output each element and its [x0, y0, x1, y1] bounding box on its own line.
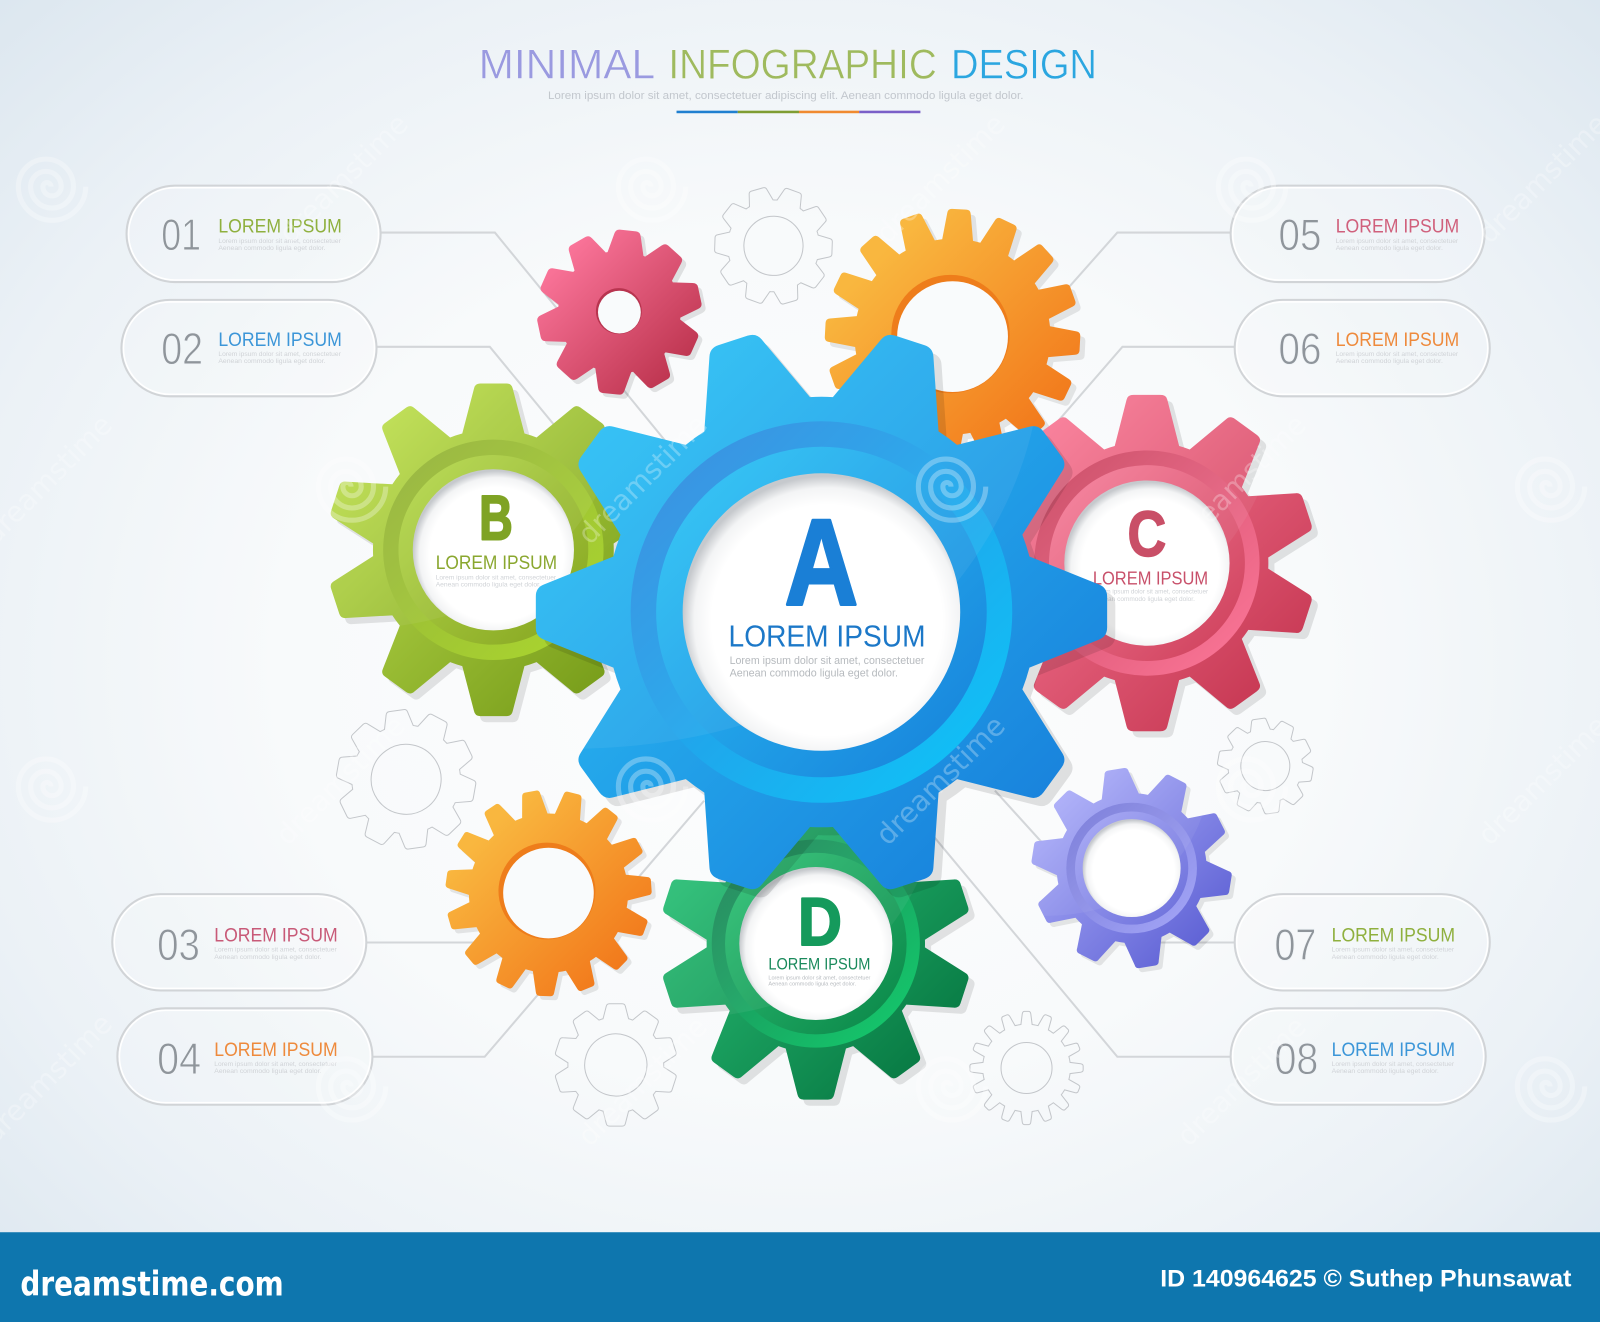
panel: item 02: LOREM IPSUM	[218, 329, 342, 351]
panel: item 02	[121, 300, 377, 396]
footer credit: ID 140964625 © Suthep Phunsawat	[1160, 1265, 1571, 1292]
gear D label: LOREM IPSUM	[768, 956, 870, 974]
title	[479, 42, 1097, 88]
gear B label: B	[479, 484, 513, 554]
gear: purple	[1032, 768, 1236, 972]
title underline	[677, 111, 920, 113]
watermark text: dreamstime	[571, 408, 714, 551]
panel: item 01: Lorem ipsum dolor sit amet, consectetuer	[218, 238, 341, 245]
watermark text: dreamstime	[869, 107, 1012, 250]
gear: small orange	[444, 789, 661, 1005]
gear C label: Aenean commodo ligula eget dolor.	[1093, 596, 1195, 603]
gear D: dark green	[663, 827, 974, 1106]
title: MINIMAL	[479, 42, 655, 88]
gear A label: A	[785, 493, 858, 630]
gear C label: C	[1128, 498, 1166, 570]
connector lines	[366, 233, 1235, 1057]
panel: item 04: 04	[157, 1033, 201, 1084]
panel: item 06: 06	[1279, 323, 1321, 374]
panel: item 07: Lorem ipsum dolor sit amet, consectetuer	[1332, 947, 1454, 954]
panel: item 05: LOREM IPSUM	[1336, 216, 1459, 238]
gear A label	[729, 493, 926, 679]
panel: item 02: Aenean commodo ligula eget dolor.	[218, 358, 326, 365]
watermark text: dreamstime	[1170, 408, 1313, 551]
gear C label: LOREM IPSUM	[1093, 567, 1208, 588]
gear D label: Lorem ipsum dolor sit amet, consectetuer	[768, 975, 871, 981]
outline gears	[325, 184, 1321, 1144]
panel: item 03	[112, 894, 366, 990]
panel: item 08: Lorem ipsum dolor sit amet, consectetuer	[1332, 1061, 1454, 1068]
panel: item 03: Aenean commodo ligula eget dolor.	[214, 954, 322, 961]
panel: item 01: Aenean commodo ligula eget dolor.	[218, 245, 326, 252]
panel: item 05: Aenean commodo ligula eget dolor.	[1336, 245, 1443, 252]
watermark text: dreamstime	[272, 107, 415, 250]
panel: item 04	[117, 1008, 372, 1105]
panel: item 03: 03	[157, 919, 200, 970]
panel: item 05	[1231, 186, 1485, 282]
panel: item 07	[1235, 894, 1490, 990]
gear D label: Aenean commodo ligula eget dolor.	[768, 981, 857, 987]
watermark text: dreamstime	[1170, 1009, 1313, 1153]
panel: item 06: LOREM IPSUM	[1336, 329, 1459, 351]
gear B label: Lorem ipsum dolor sit amet, consectetuer	[436, 574, 556, 581]
gear C label: Lorem ipsum dolor sit amet, consectetuer	[1093, 589, 1208, 596]
panel: item 01: LOREM IPSUM	[218, 216, 342, 238]
gear A label: LOREM IPSUM	[729, 620, 926, 654]
gear D label: D	[798, 885, 842, 960]
panel: item 03: LOREM IPSUM	[214, 925, 338, 947]
panel: item 08	[1231, 1008, 1486, 1105]
gear B label: LOREM IPSUM	[436, 552, 557, 574]
gear: large orange	[824, 208, 1086, 445]
gear B label	[436, 484, 557, 589]
watermark text: dreamstime	[269, 709, 412, 852]
gear A: main blue	[536, 334, 1116, 898]
outline gear bottom right	[970, 1011, 1083, 1125]
panel: item 06: Aenean commodo ligula eget dolor.	[1336, 358, 1443, 365]
watermark text: dreamstime	[571, 1009, 714, 1153]
outline gear right	[1210, 710, 1321, 822]
panel: item 03: Lorem ipsum dolor sit amet, consectetuer	[214, 947, 337, 954]
panel: item 01: 01	[161, 209, 201, 260]
footer logo: dreamstime.com	[20, 1264, 284, 1303]
watermark text	[0, 107, 1600, 1153]
gear A label: Lorem ipsum dolor sit amet, consectetuer	[730, 655, 925, 667]
panel: item 04: Lorem ipsum dolor sit amet, consectetuer	[214, 1061, 337, 1068]
panel: item 08: Aenean commodo ligula eget dolor.	[1332, 1068, 1439, 1075]
footer banner	[0, 1232, 1600, 1322]
panel: item 07: 07	[1274, 919, 1316, 970]
gear A label: Aenean commodo ligula eget dolor.	[730, 667, 898, 679]
panel: item 01	[127, 186, 381, 282]
gear C: red	[1022, 394, 1318, 738]
panel: item 06	[1235, 300, 1490, 396]
outline gear top	[713, 184, 834, 308]
panel: item 04: LOREM IPSUM	[214, 1039, 338, 1061]
subtitle: Lorem ipsum dolor sit amet, consectetuer adipiscing elit. Aenean commodo ligula eget dolor.	[548, 90, 1023, 102]
gear C label	[1093, 498, 1208, 603]
panel: item 08: LOREM IPSUM	[1332, 1039, 1455, 1061]
gear: small pink	[537, 230, 710, 403]
panel: item 02: 02	[161, 323, 203, 374]
panel: item 07: Aenean commodo ligula eget dolor.	[1332, 954, 1439, 961]
outline gear bottom left	[538, 986, 693, 1144]
outline gear left	[325, 697, 487, 861]
panel: item 05: Lorem ipsum dolor sit amet, consectetuer	[1336, 238, 1458, 245]
title: INFOGRAPHIC	[668, 42, 937, 88]
title: DESIGN	[951, 42, 1097, 88]
panel: item 02: Lorem ipsum dolor sit amet, consectetuer	[218, 351, 341, 358]
panel: item 07: LOREM IPSUM	[1332, 925, 1455, 947]
gear D label	[768, 885, 871, 987]
watermark text: dreamstime	[869, 709, 1012, 852]
gear B label: Aenean commodo ligula eget dolor.	[436, 582, 541, 589]
panel: item 08: 08	[1274, 1033, 1318, 1084]
panel: item 04: Aenean commodo ligula eget dolor.	[214, 1068, 322, 1075]
panel: item 06: Lorem ipsum dolor sit amet, consectetuer	[1336, 351, 1458, 358]
gear B: green	[330, 384, 620, 722]
panel: item 05: 05	[1279, 209, 1321, 260]
watermark spirals	[18, 159, 1585, 1120]
